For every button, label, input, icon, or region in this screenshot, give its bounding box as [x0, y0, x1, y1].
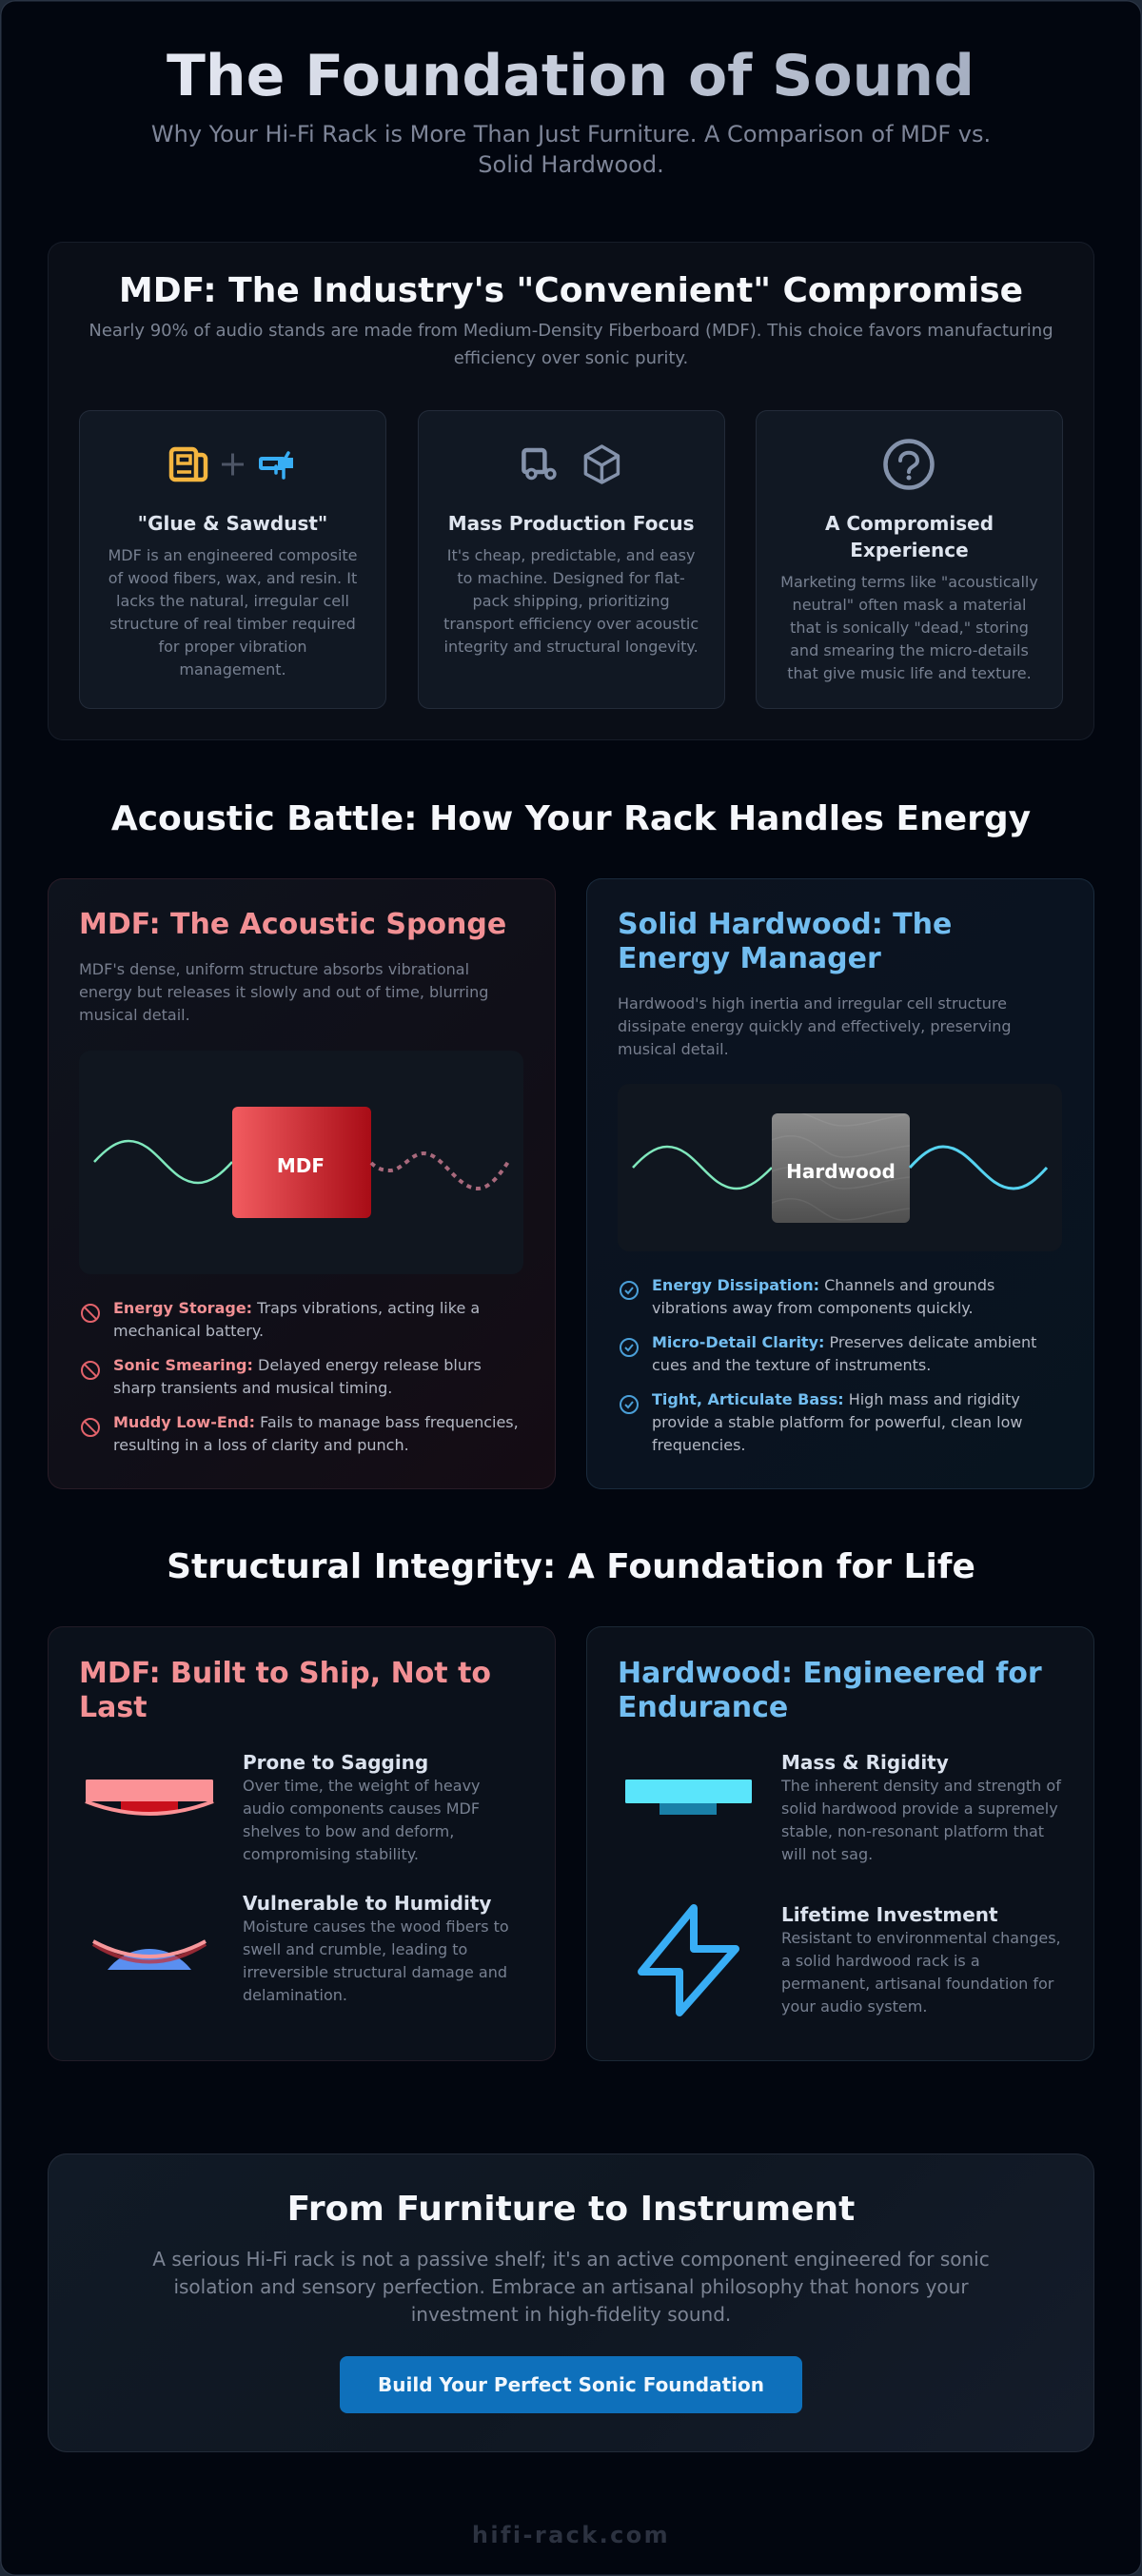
intro text [89, 321, 1053, 368]
button: Build Your Perfect Sonic Foundation [378, 2373, 764, 2396]
heading: Energy Manager [618, 942, 881, 975]
icon: prohibited [81, 1418, 100, 1437]
subtitle: Why Your Hi-Fi Rack is More Than Just Furniture. A Comparison of MDF vs. [151, 121, 991, 147]
text: isolation and sensory perfection. Embrace an artisanal philosophy that honors your [173, 2275, 969, 2298]
icon: lightning bolt [633, 1900, 747, 2020]
text [243, 1917, 509, 2004]
card text: lacks the natural, irregular cell [116, 592, 349, 610]
text [48, 2246, 1094, 2328]
item: muddy low-end [81, 1413, 519, 1454]
text: compromising stability. [243, 1845, 419, 1863]
icon: sagging shelf [85, 1780, 214, 1816]
item: mass and rigidity [781, 1749, 1067, 1869]
heading: acoustic battle: Acoustic Battle: How Your Rack Handles Energy [111, 799, 1031, 838]
text: Moisture causes the wood fibers to [243, 1917, 509, 1936]
card text: to machine. Designed for flat- [457, 569, 685, 587]
card text [443, 546, 699, 656]
card text: integrity and structural longevity. [443, 638, 699, 656]
icon: check [620, 1281, 639, 1300]
heading: MDF: Built to Ship, Not to [79, 1657, 491, 1690]
text: Resistant to environmental changes, [781, 1929, 1061, 1947]
card text [108, 546, 358, 678]
text: mechanical battery. [113, 1322, 264, 1340]
card text: management. [179, 660, 286, 678]
wave chart: Hardwood [786, 1160, 896, 1183]
item: energy dissipation [620, 1276, 994, 1317]
icon: prohibited [81, 1361, 100, 1380]
card title [825, 512, 994, 561]
icon: question mark [883, 439, 935, 490]
icon: humidity warped shelf [92, 1939, 207, 1970]
icon: stable shelf [625, 1780, 752, 1815]
card text: for proper vibration [158, 638, 307, 656]
text: investment in high-fidelity sound. [411, 2303, 731, 2326]
description: musical detail. [79, 1006, 190, 1024]
icon: check [620, 1395, 639, 1414]
item: micro-detail clarity [620, 1333, 1036, 1374]
text [781, 1775, 1061, 1866]
footer: hifi-rack.com [472, 2522, 670, 2548]
intro text: Nearly 90% of audio stands are made from Medium-Density Fiberboard (MDF). This choice favors manufacturing [89, 321, 1053, 341]
icon: newspaper plus glue [169, 447, 293, 482]
text: Energy Dissipation: Channels and grounds [652, 1276, 994, 1294]
text [781, 1927, 1061, 2018]
heading: structural integrity: Structural Integrity: A Foundation for Life [167, 1547, 975, 1586]
text: Sonic Smearing: Delayed energy release blurs [113, 1356, 482, 1374]
text: solid hardwood provide a supremely [781, 1799, 1058, 1818]
text: cues and the texture of instruments. [652, 1356, 931, 1374]
icon: prohibited [81, 1304, 100, 1323]
text [652, 1333, 1036, 1374]
text: resulting in a loss of clarity and punch. [113, 1436, 409, 1454]
text: Energy Storage: Traps vibrations, acting like a [113, 1299, 480, 1317]
card text: It's cheap, predictable, and easy [447, 546, 695, 564]
heading: MDF: The Acoustic Sponge [79, 908, 506, 941]
text: irreversible structural damage and [243, 1963, 507, 1981]
description: musical detail. [618, 1040, 729, 1058]
heading: From Furniture to Instrument [287, 2190, 855, 2229]
text [113, 1356, 482, 1397]
text: vibrations away from components quickly. [652, 1299, 974, 1317]
wave chart [632, 1113, 1048, 1223]
panel: call to action [48, 2153, 1094, 2452]
card text: pack shipping, prioritizing [473, 592, 670, 610]
panel: hardwood engineered for endurance [586, 1626, 1094, 2061]
text: shelves to bow and deform, [243, 1822, 454, 1840]
card text: that give music life and texture. [787, 664, 1032, 682]
heading: Hardwood: Engineered for [618, 1657, 1042, 1690]
card text: MDF is an engineered composite [108, 546, 358, 564]
card text: that is sonically "dead," storing [790, 619, 1029, 637]
subtitle [151, 121, 991, 178]
title: Lifetime Investment [781, 1903, 998, 1926]
heading: Last [79, 1691, 148, 1724]
text: audio components causes MDF [243, 1799, 480, 1818]
card text: neutral" often mask a material [793, 596, 1026, 614]
text: your audio system. [781, 1997, 927, 2016]
item: tight bass [620, 1390, 1022, 1454]
card: compromised experience [756, 410, 1063, 709]
card text [780, 573, 1038, 682]
title: Vulnerable to Humidity [243, 1892, 491, 1915]
intro text: efficiency over sonic purity. [454, 348, 688, 368]
card text: structure of real timber required [109, 615, 356, 633]
text: delamination. [243, 1986, 347, 2004]
diagram: wave through MDF [79, 1051, 523, 1274]
diagram: wave through hardwood [632, 1113, 1048, 1223]
title: Prone to Sagging [243, 1751, 428, 1774]
text: will not sag. [781, 1845, 873, 1863]
icon: check [620, 1338, 639, 1357]
title: Mass & Rigidity [781, 1751, 949, 1774]
heading: MDF compromise: MDF: The Industry's "Convenient" Compromise [119, 271, 1023, 310]
item: prone to sagging [243, 1751, 480, 1863]
card title: Mass Production Focus [448, 512, 694, 535]
text [652, 1276, 994, 1317]
text: The inherent density and strength of [781, 1777, 1061, 1795]
text: permanent, artisanal foundation for [781, 1975, 1053, 1993]
card: glue and sawdust [79, 410, 386, 709]
text: Over time, the weight of heavy [243, 1777, 480, 1795]
panel: MDF acoustic sponge [48, 878, 556, 1489]
text [113, 1413, 519, 1454]
item: sonic smearing [81, 1356, 482, 1397]
text: Muddy Low-End: Fails to manage bass frequencies, [113, 1413, 519, 1431]
text: Tight, Articulate Bass: High mass and rigidity [652, 1390, 1020, 1408]
card text: and smearing the micro-details [790, 641, 1029, 659]
card text: transport efficiency over acoustic [443, 615, 699, 633]
card: mass production [418, 410, 725, 709]
title: The Foundation of Sound [167, 43, 975, 109]
text: stable, non-resonant platform that [781, 1822, 1044, 1840]
card title: "Glue & Sawdust" [138, 512, 327, 535]
card text: of wood fibers, wax, and resin. It [108, 569, 357, 587]
item: lifetime investment [781, 1901, 1067, 2021]
heading: Endurance [618, 1691, 788, 1724]
heading [618, 1657, 1042, 1724]
text: A serious Hi-Fi rack is not a passive shelf; it's an active component engineered for sonic [152, 2248, 990, 2271]
button [340, 2356, 802, 2413]
text: sharp transients and musical timing. [113, 1379, 392, 1397]
description [79, 960, 488, 1024]
heading: Solid Hardwood: The [618, 908, 952, 941]
text: Micro-Detail Clarity: Preserves delicate ambient [652, 1333, 1036, 1351]
description: MDF's dense, uniform structure absorbs vibrational [79, 960, 469, 978]
description: energy but releases it slowly and out of time, blurring [79, 983, 488, 1001]
card title: Experience [850, 539, 969, 561]
panel: MDF built to ship [48, 1626, 556, 2061]
description: dissipate energy quickly and effectively, preserving [618, 1017, 1012, 1035]
text: provide a stable platform for powerful, clean low [652, 1413, 1022, 1431]
item: vulnerable to humidity [243, 1892, 509, 2004]
panel: solid hardwood energy manager [586, 878, 1094, 1489]
heading [618, 908, 952, 975]
text [243, 1777, 480, 1863]
description [618, 994, 1012, 1058]
wave chart: MDF [277, 1154, 325, 1177]
subtitle: Solid Hardwood. [478, 151, 664, 178]
item: energy storage [81, 1299, 480, 1340]
text: frequencies. [652, 1436, 746, 1454]
wave chart [93, 1107, 509, 1218]
text: swell and crumble, leading to [243, 1940, 467, 1958]
heading [79, 1657, 491, 1724]
icon: truck and box [522, 444, 620, 484]
text [652, 1390, 1022, 1454]
card text: Marketing terms like "acoustically [780, 573, 1038, 591]
card title: A Compromised [825, 512, 994, 535]
description: Hardwood's high inertia and irregular cell structure [618, 994, 1007, 1013]
text [113, 1299, 480, 1340]
panel: MDF compromise [48, 242, 1094, 740]
text: a solid hardwood rack is a [781, 1952, 980, 1970]
